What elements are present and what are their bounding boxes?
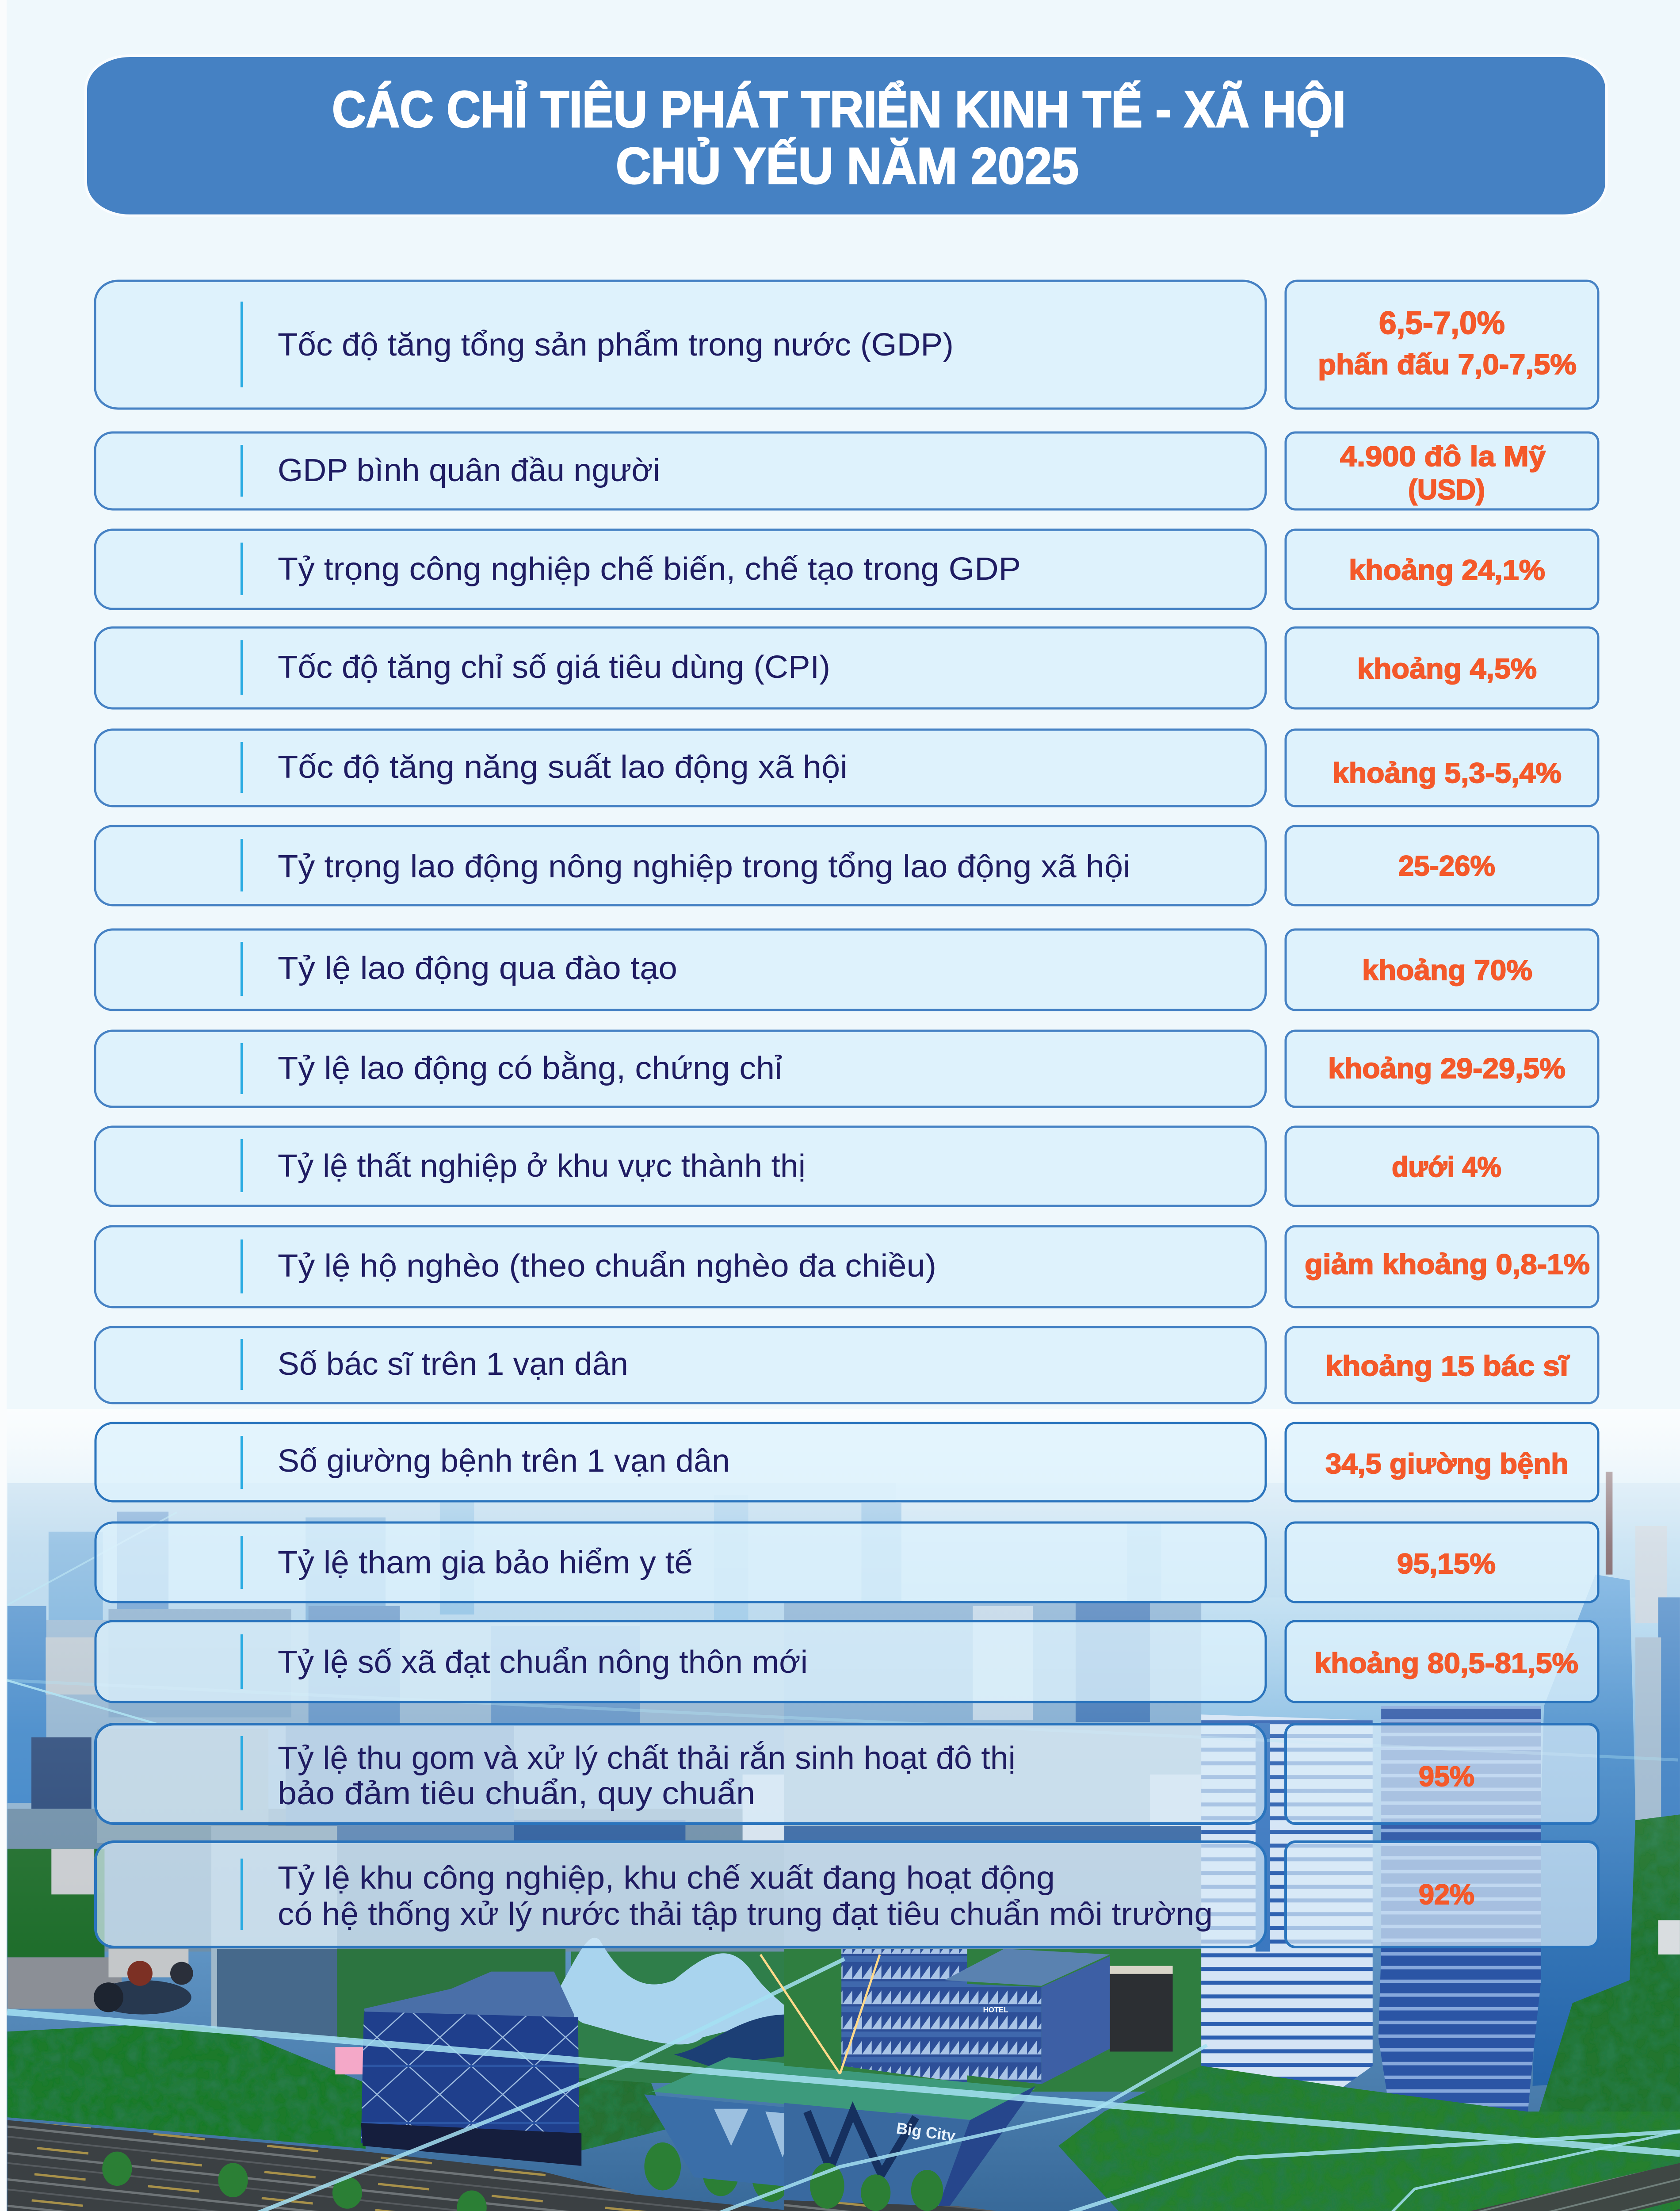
photo: roadside trees: [102, 2142, 889, 2211]
indicator: trained labour: Tỷ lệ lao động qua đào tạo: [278, 951, 677, 986]
value: doctors per 10,000: khoảng 15 bác sĩ: [1325, 1350, 1570, 1382]
photo: blue tower: [1378, 1706, 1541, 2123]
title: [332, 80, 1346, 195]
photo: left half of the city: [8, 1483, 896, 2211]
value: urban unemployment: dưới 4%: [1392, 1151, 1501, 1183]
row: GDP growth: [95, 281, 1598, 409]
title: CÁC CHỈ TIÊU PHÁT TRIỂN KINH TẾ - XÃ HỘI: [332, 80, 1346, 138]
indicator: doctors per 10,000: [95, 1327, 1266, 1403]
photo: central trees: [1058, 2066, 1680, 2211]
row: trained labour: [95, 930, 1598, 1010]
value: agricultural labour share: 25-26%: [1398, 850, 1495, 882]
value: certified labour: [1286, 1031, 1598, 1107]
indicator: CPI: Tốc độ tăng chỉ số giá tiêu dùng (CPI): [278, 650, 830, 685]
value: urban solid waste: [1286, 1724, 1598, 1824]
indicator: doctors per 10,000: Số bác sĩ trên 1 vạn dân: [278, 1346, 628, 1382]
photo: wave-shaped pavilion: [551, 1938, 794, 2044]
row: industrial zone wastewater: [95, 1842, 1598, 1947]
indicator: certified labour: Tỷ lệ lao động có bằng, chứng chỉ: [278, 1051, 782, 1086]
row: doctors per 10,000: [95, 1327, 1598, 1403]
value: CPI: khoảng 4,5%: [1357, 653, 1537, 685]
value: GDP growth: 6,5-7,0%: [1379, 306, 1505, 341]
photo: right half of the city: [784, 1472, 1680, 2211]
indicator: new rural communes: [95, 1621, 1266, 1702]
photo: golden light beams: [760, 1955, 880, 2074]
row: health insurance: [95, 1522, 1598, 1602]
row: certified labour: [95, 1031, 1598, 1107]
row: hospital beds per 10,000: [95, 1423, 1598, 1501]
photo: Hotel buildings: HOTEL: [983, 2005, 1008, 2014]
value: health insurance: [1286, 1522, 1598, 1602]
value: doctors per 10,000: [1286, 1327, 1598, 1403]
value: industrial zone wastewater: 92%: [1419, 1878, 1474, 1910]
indicator: industrial zone wastewater: Tỷ lệ khu công nghiệp, khu chế xuất đang hoạt động: [278, 1860, 1055, 1896]
value: certified labour: khoảng 29-29,5%: [1328, 1052, 1565, 1084]
left margin strip: [0, 0, 7, 2211]
photo: glass tower: [1533, 1575, 1642, 2086]
photo: trees beside Big City: [810, 2163, 1161, 2211]
row: GDP per capita: [95, 432, 1598, 509]
indicator: urban solid waste: [95, 1724, 1266, 1824]
value: GDP per capita: [1286, 432, 1598, 509]
photo: Hotel buildings: [841, 1949, 1173, 2084]
indicator: hospital beds per 10,000: Số giường bệnh trên 1 vạn dân: [278, 1443, 730, 1479]
value: urban unemployment: [1286, 1127, 1598, 1206]
indicator: industrial zone wastewater: [95, 1842, 1266, 1947]
photo: light-blue network lines: [7, 1512, 1680, 2211]
background photo: smart city with towers, trees and highways: [0, 1409, 1680, 2211]
value: GDP growth: phấn đấu 7,0-7,5%: [1318, 348, 1577, 380]
indicator: agricultural labour share: Tỷ trọng lao động nông nghiệp trong tổng lao động xã hội: [278, 849, 1130, 884]
indicator: poor households: [95, 1226, 1266, 1307]
title panel: [86, 56, 1607, 216]
indicator: urban unemployment: [95, 1127, 1266, 1206]
photo: Big City building front: [784, 2066, 1035, 2206]
value: hospital beds per 10,000: [1286, 1423, 1598, 1501]
indicator: labour productivity: [95, 730, 1266, 806]
indicator: GDP growth: [95, 281, 1266, 409]
value: new rural communes: [1286, 1621, 1598, 1702]
indicator: urban solid waste: bảo đảm tiêu chuẩn, quy chuẩn: [278, 1776, 755, 1811]
photo: striped tower: [1201, 1714, 1373, 2094]
value: labour productivity: khoảng 5,3-5,4%: [1333, 757, 1562, 789]
photo: flying vehicle: [94, 1961, 193, 2015]
value: GDP growth: [1286, 281, 1598, 409]
value: agricultural labour share: [1286, 826, 1598, 905]
row: labour productivity: [95, 730, 1598, 806]
indicator: CPI: [95, 627, 1266, 708]
indicator: new rural communes: Tỷ lệ số xã đạt chuẩn nông thôn mới: [278, 1645, 808, 1680]
photo: white top fade: [0, 1409, 1680, 1948]
photo: Big City building front: Big City: [895, 2119, 957, 2145]
row: poor households: [95, 1226, 1598, 1307]
value: trained labour: [1286, 930, 1598, 1010]
indicator: GDP per capita: GDP bình quân đầu người: [278, 453, 660, 488]
title: CHỦ YẾU NĂM 2025: [616, 137, 1079, 195]
indicator: certified labour: [95, 1031, 1266, 1107]
photo: glass block building: [361, 1972, 581, 2166]
value: urban solid waste: 95%: [1419, 1760, 1474, 1792]
photo: left trees: [8, 2023, 366, 2149]
indicator: health insurance: Tỷ lệ tham gia bảo hiểm y tế: [278, 1545, 693, 1580]
row: urban unemployment: [95, 1127, 1598, 1206]
value: health insurance: 95,15%: [1397, 1548, 1496, 1580]
value: poor households: giảm khoảng 0,8-1%: [1305, 1248, 1590, 1280]
photo: road network: [784, 2200, 1241, 2211]
row: CPI: [95, 627, 1598, 708]
row: agricultural labour share: [95, 826, 1598, 905]
value: labour productivity: [1286, 730, 1598, 806]
row: new rural communes: [95, 1621, 1598, 1702]
indicator: GDP growth: Tốc độ tăng tổng sản phẩm trong nước (GDP): [278, 327, 954, 363]
row: urban solid waste: [95, 1724, 1598, 1824]
value: manufacturing share: khoảng 24,1%: [1349, 554, 1545, 586]
indicator: health insurance: [95, 1522, 1266, 1602]
indicator: trained labour: [95, 930, 1266, 1010]
value: GDP per capita: 4.900 đô la Mỹ: [1340, 440, 1546, 472]
indicator: manufacturing share: [95, 530, 1266, 609]
value: poor households: [1286, 1226, 1598, 1307]
value: industrial zone wastewater: [1286, 1842, 1598, 1947]
indicator: agricultural labour share: [95, 826, 1266, 905]
indicator: GDP per capita: [95, 432, 1266, 509]
value: GDP per capita: (USD): [1408, 474, 1485, 505]
value: trained labour: khoảng 70%: [1362, 954, 1532, 986]
photo: road network: [8, 2120, 896, 2211]
photo: right trees: [1527, 1814, 1680, 2152]
row: manufacturing share: [95, 530, 1598, 609]
indicator: industrial zone wastewater: có hệ thống xử lý nước thải tập trung đạt tiêu chuẩn môi trường: [278, 1897, 1213, 1932]
indicator: urban solid waste: Tỷ lệ thu gom và xử lý chất thải rắn sinh hoạt đô thị: [278, 1740, 1016, 1776]
indicator: labour productivity: Tốc độ tăng năng suất lao động xã hội: [278, 750, 848, 785]
value: CPI: [1286, 627, 1598, 708]
photo: Big City building: [644, 2057, 896, 2197]
indicator: hospital beds per 10,000: [95, 1423, 1266, 1501]
indicator: urban unemployment: Tỷ lệ thất nghiệp ở khu vực thành thị: [278, 1148, 806, 1184]
value: hospital beds per 10,000: 34,5 giường bệnh: [1325, 1448, 1569, 1480]
value: new rural communes: khoảng 80,5-81,5%: [1314, 1647, 1578, 1679]
indicator: manufacturing share: Tỷ trọng công nghiệp chế biến, chế tạo trong GDP: [278, 551, 1021, 587]
value: manufacturing share: [1286, 530, 1598, 609]
indicator: poor households: Tỷ lệ hộ nghèo (theo chuẩn nghèo đa chiều): [278, 1248, 936, 1284]
